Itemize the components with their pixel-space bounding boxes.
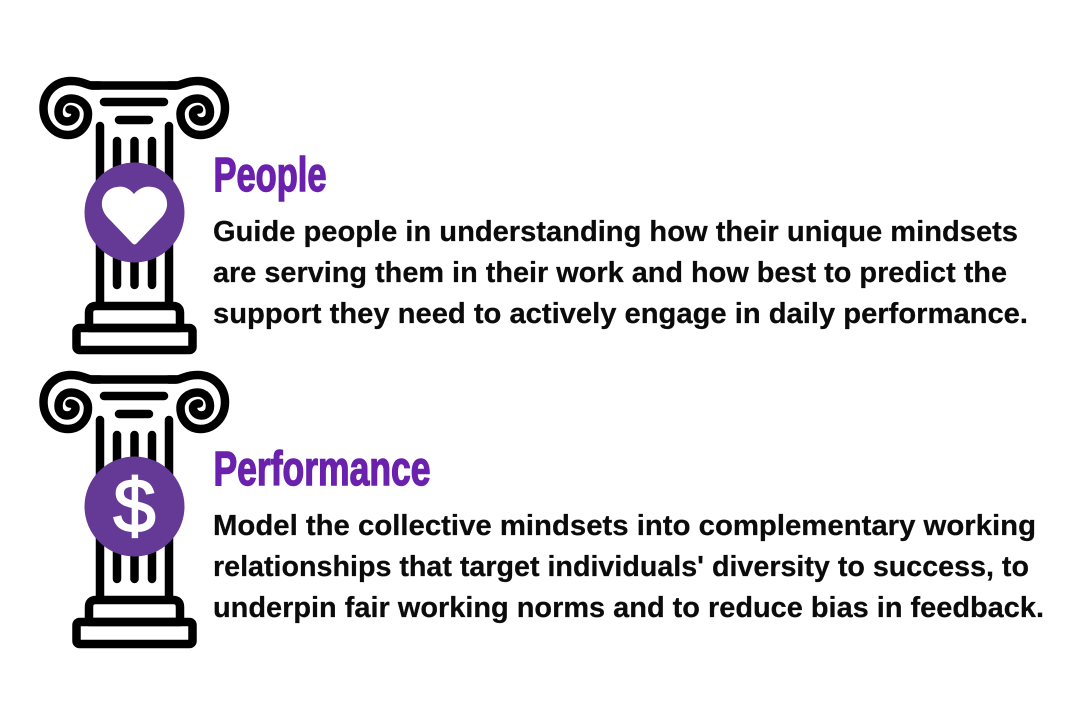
heading: Performance: Performance [214, 443, 430, 496]
heading: People: People [214, 149, 326, 202]
section: Performance [44, 375, 1044, 644]
text block: Performance description: relationships that target individuals' diversity to success, to [213, 551, 1029, 583]
icon: purple dollar badge [84, 456, 184, 556]
icon: purple heart badge [84, 162, 184, 262]
text block: People description: support they need to actively engage in daily performance. [213, 298, 1028, 330]
section: People [44, 81, 1028, 350]
text block: Performance description [213, 510, 1044, 624]
icon: column [44, 375, 225, 644]
text block: People description [213, 216, 1028, 330]
text block: People description: are serving them in their work and how best to predict the [213, 257, 1007, 289]
text block: Performance description: underpin fair working norms and to reduce bias in feedback. [213, 592, 1044, 624]
icon: column [44, 81, 225, 350]
text block: People description: Guide people in understanding how their unique mindsets [213, 216, 1018, 248]
text block: Performance description: Model the collective mindsets into complementary working [213, 510, 1036, 542]
icon: purple dollar badge: $ [113, 464, 156, 549]
